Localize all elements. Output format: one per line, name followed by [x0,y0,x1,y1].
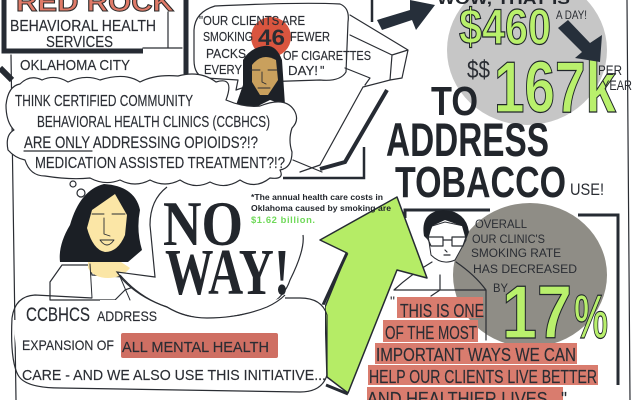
text: overall rate: SMOKING RATE [471,248,561,260]
callout: annual health care costs: *The annual health care costs in [251,192,383,202]
panel: thought cloud about CCBHCs [6,74,297,197]
text: bubble wording: ALL MENTAL HEALTH [122,339,269,356]
text: quote: " [390,293,395,309]
text: bubble wording: ADDRESS [97,308,157,324]
text: $$: $$ [467,56,490,84]
speech bubble: no way [117,187,303,318]
panel: client speech and cigarette pack [186,0,408,178]
text: bubble wording: CARE - AND WE ALSO USE THIS INITIATIVE... [22,367,326,384]
panel: man quote and smoking rate [367,203,618,400]
text: quote: OF THE MOST [385,323,477,343]
text: thought cloud wording [15,93,285,172]
callout: annual health care costs [251,192,391,225]
text: no way: NO [163,189,243,259]
panel: CCBHCs address bubble [12,275,327,392]
text: per year: PER [598,63,622,78]
text: a day: A DAY! [556,10,587,22]
panel: woman and No Way: WAY! [165,236,290,309]
panel: woman and No Way [50,184,303,318]
text: quote: IMPORTANT WAYS WE CAN [376,345,576,365]
text: client quote: 46 [258,25,285,50]
number: 17 percent: % [574,283,608,352]
arrow: top center pointing right [377,0,435,30]
text: Oklahoma City: OKLAHOMA CITY [20,57,130,74]
text: client quote: EVERY [204,63,243,77]
arrow: large green up arrow [320,197,427,394]
number: 17 percent: 17 [502,270,572,354]
panel: Red Rock title box [4,0,182,400]
figure: woman with dark wavy hair [50,184,155,300]
panel: savings grey circle [437,0,632,128]
text: client quote: DAY! [288,64,318,78]
text: Behavioral Health Services: BEHAVIORAL HEALTH [10,18,156,35]
heading: to address tobacco use [386,78,604,207]
text: quote [367,293,597,400]
text: thought cloud wording: MEDICATION ASSISTED TREATMENT?!? [35,155,285,172]
callout: annual health care costs: Oklahoma caused by smoking are [251,203,391,213]
arrow: small left arrow fragment [0,68,12,80]
text: quote: THIS IS ONE [400,301,484,321]
text: thought cloud wording: ARE ONLY ADDRESSING OPIOIDS?!? [24,134,258,152]
figure: woman with long dark hair [235,46,285,110]
text: bubble wording: EXPANSION OF [22,337,114,353]
text: overall rate: HAS DECREASED [473,264,577,276]
text: client quote: "OUR CLIENTS ARE [199,14,305,28]
arrow: pointing down right [558,20,602,62]
text: client quote [199,14,371,78]
text: client quote: OF CIGARETTES [283,49,371,63]
panel: Red Rock title box: SERVICES [46,34,113,51]
heading: to address tobacco use: USE! [570,180,604,199]
text: overall rate: OUR CLINIC'S [472,234,545,246]
heading: to address tobacco use: TOBACCO [395,158,566,207]
text: bubble wording: CCBHCS [26,305,90,326]
heading: to address tobacco use: ADDRESS [386,113,549,166]
red circle with 46 [251,17,291,57]
text: bubble wording [22,305,326,384]
quote highlight bars [367,297,598,400]
text: overall rate [471,219,577,295]
text: client quote: SMOKING [203,30,253,44]
callout: annual health care costs: $1.62 billion. [251,214,315,225]
text: overall rate: OVERALL [475,219,528,231]
text: thought cloud wording: THINK CERTIFIED COMMUNITY [15,93,193,110]
text: client quote: PACKS [206,47,246,61]
text: overall rate: BY [493,283,508,295]
highlight: all mental health [121,333,278,358]
figure: man with glasses [394,210,486,340]
text: client quote: FEWER [290,30,330,44]
panel: savings grey circle: YEAR [602,78,632,93]
heading: to address tobacco use: TO [431,78,478,124]
text: client quote: " [320,64,324,78]
number: $460: $460 [459,0,551,55]
text: thought cloud wording: BEHAVIORAL HEALTH CLINICS (CCBHCS) [37,114,270,131]
